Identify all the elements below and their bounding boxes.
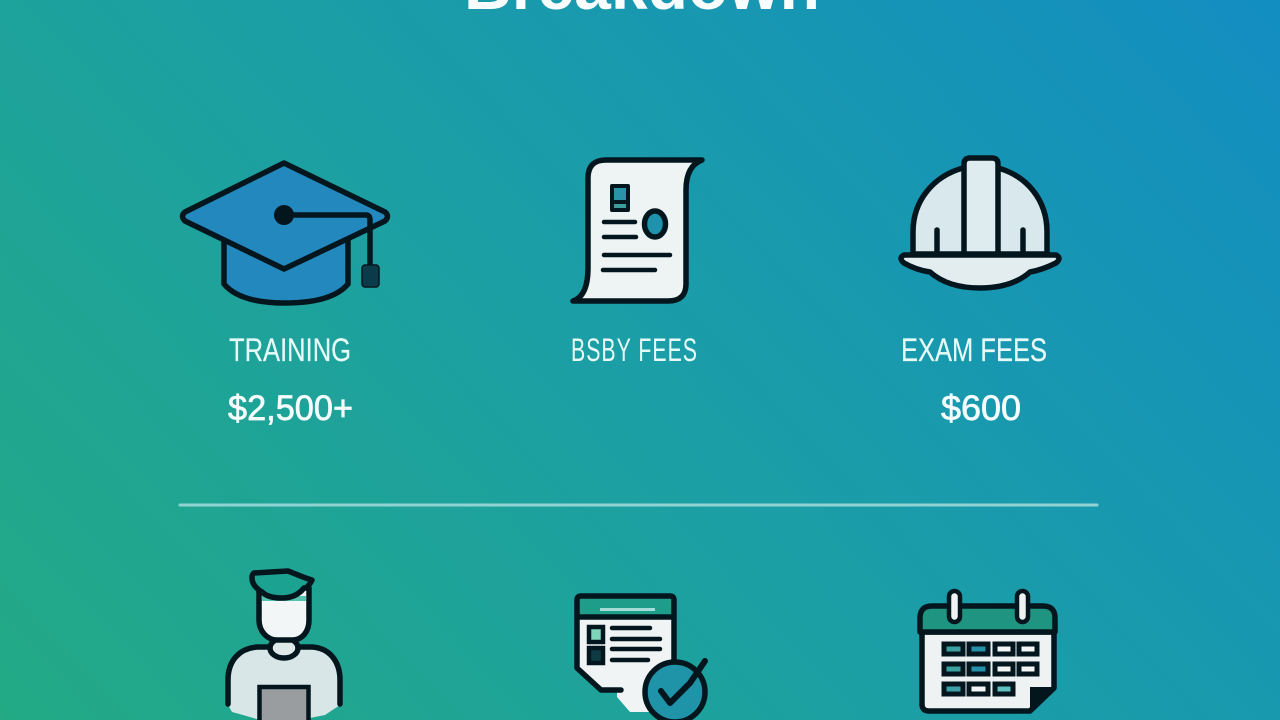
label: exam fees: EXAM FEES <box>901 332 1047 368</box>
value: exam cost: $600 <box>941 389 1021 428</box>
panel: training <box>182 163 388 428</box>
icon: person with laptop <box>228 571 340 720</box>
icon: graduation cap <box>182 163 388 303</box>
label: BSBY fees: BSBY FEES <box>571 332 698 368</box>
value: training cost: $2,500+ <box>228 389 353 428</box>
icon: checklist with check badge <box>577 596 705 720</box>
icon: hard hat <box>901 158 1059 288</box>
icon: document <box>573 160 702 301</box>
icon: calendar <box>920 591 1056 712</box>
divider <box>180 504 1097 506</box>
label: training: TRAINING <box>229 332 351 368</box>
panel: BSBY fees <box>571 160 702 368</box>
panel: exam fees <box>901 158 1059 428</box>
